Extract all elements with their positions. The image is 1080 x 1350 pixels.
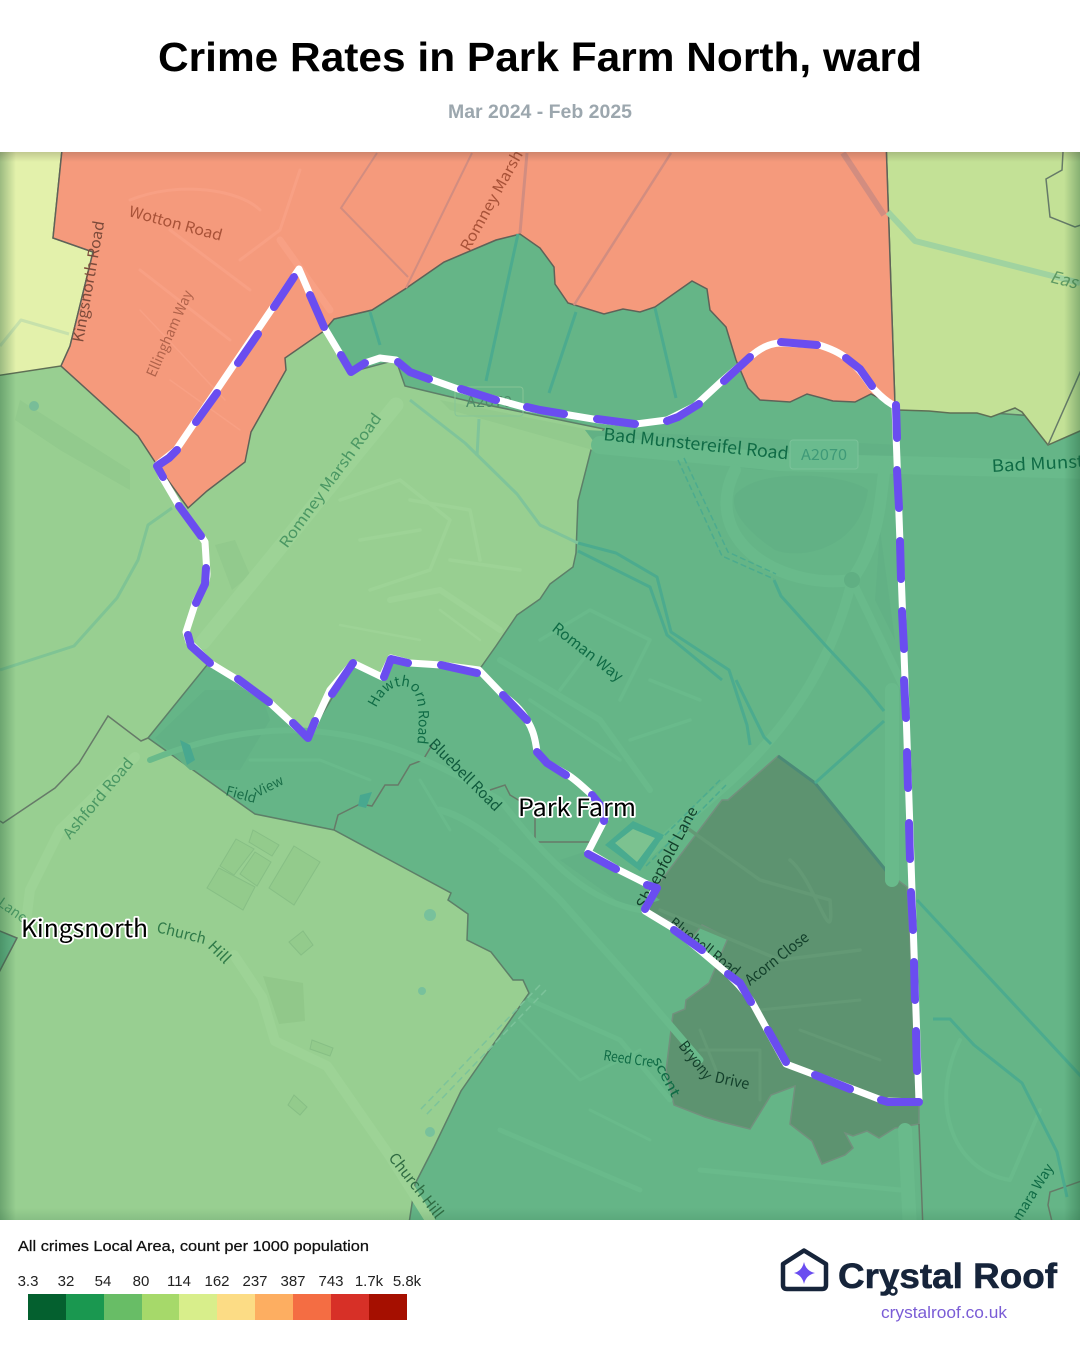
road labels: Roman Way (548, 617, 628, 686)
streams and rail lines (0, 212, 1080, 1197)
legend colour bar (28, 1294, 407, 1320)
legend scale values: 1.7k (355, 1273, 384, 1290)
logo key ring on y (890, 1288, 896, 1294)
road labels: Field (224, 780, 259, 807)
road labels: scent (648, 1053, 686, 1101)
road labels: Bluebell Road (424, 734, 506, 816)
legend scale values: 3.3 (18, 1273, 38, 1290)
road shield: obscured A2070 (455, 387, 523, 416)
road labels: Eas (1048, 263, 1080, 294)
legend scale values: 743 (318, 1273, 344, 1290)
ward outline: purple dashes (157, 277, 919, 1102)
title: Crime Rates in Park Farm North, ward (158, 34, 922, 80)
legend scale values: 237 (242, 1273, 268, 1290)
place label: Kingsnorth: Kingsnorth (21, 909, 148, 944)
road labels: Kingsnorth Road (67, 219, 109, 344)
area: yellow green north-east (886, 140, 1080, 445)
road labels: Bryony (674, 1036, 718, 1084)
website url: crystalroof.co.uk (881, 1304, 1008, 1322)
road labels: mara Way (1007, 1159, 1059, 1225)
legend title: All crimes Local Area, count per 1000 population (18, 1238, 369, 1255)
legend (18, 1238, 422, 1320)
road labels: Romney Marsh (455, 146, 528, 254)
road shield: obscured A2070: A2070 (466, 391, 512, 412)
road shield: A2070: A2070 (801, 444, 847, 465)
salmon area sub-boundaries (341, 153, 884, 305)
subtitle: date range: Mar 2024 - Feb 2025 (448, 102, 632, 123)
area: light green low-crime base (0, 332, 1023, 1220)
legend scale values: 5.8k (393, 1273, 422, 1290)
road labels: Drive (713, 1066, 752, 1094)
legend scale values: 162 (204, 1273, 230, 1290)
area: medium green central and eastern neighbourhoods (148, 234, 1080, 1230)
dark block shaded north-east edge (778, 756, 888, 873)
legend scale values: 387 (280, 1273, 306, 1290)
water: ponds (29, 401, 860, 1137)
road labels: Wotton Road (127, 201, 225, 246)
road labels: Hawthorn Road (368, 674, 429, 744)
area: pale yellow north-west (0, 140, 93, 376)
area: small dark patch west edge (0, 930, 18, 972)
pond: Park Farm square basin (605, 821, 664, 871)
legend scale values: 80 (133, 1273, 149, 1290)
legend scale values: 32 (58, 1273, 74, 1290)
icon: house with sparkle (783, 1250, 826, 1289)
fields and buildings at Kingsnorth (207, 830, 333, 1115)
road labels: Ashford Road (58, 753, 138, 843)
subtly darker land patches (176, 430, 660, 902)
place label: Park Farm: Park Farm (518, 788, 636, 823)
road labels: Bad Munst (991, 447, 1080, 477)
roads: lighter tinted carriageways (147, 436, 1071, 1220)
logo: Crystal Roof (783, 1250, 1057, 1322)
road labels: Sheepfold Lane (631, 803, 702, 912)
road labels: Ellingham Way (141, 286, 198, 380)
area: dark green-grey lowest-crime block (643, 756, 919, 1164)
ward outline: white base (157, 269, 919, 1102)
road labels: Acorn Close (740, 927, 813, 990)
legend scale values: 54 (95, 1273, 111, 1290)
road labels: Reed Cre (602, 1045, 655, 1072)
road labels: Bad Munstereifel Road (602, 420, 790, 464)
area: salmon high-crime north (53, 140, 895, 508)
road shield: A2070 (790, 440, 858, 469)
road labels: Church Hill (384, 1148, 449, 1223)
road labels: View (251, 769, 287, 801)
legend scale values: 114 (167, 1273, 191, 1290)
road labels: Hill (203, 936, 236, 968)
legend scale values (18, 1273, 422, 1290)
logo wordmark: Crystal Roof (838, 1257, 1057, 1296)
road labels: Church (155, 916, 208, 949)
road labels: Romney Marsh Road (274, 409, 386, 552)
road labels: Bluebell Road (665, 912, 745, 981)
